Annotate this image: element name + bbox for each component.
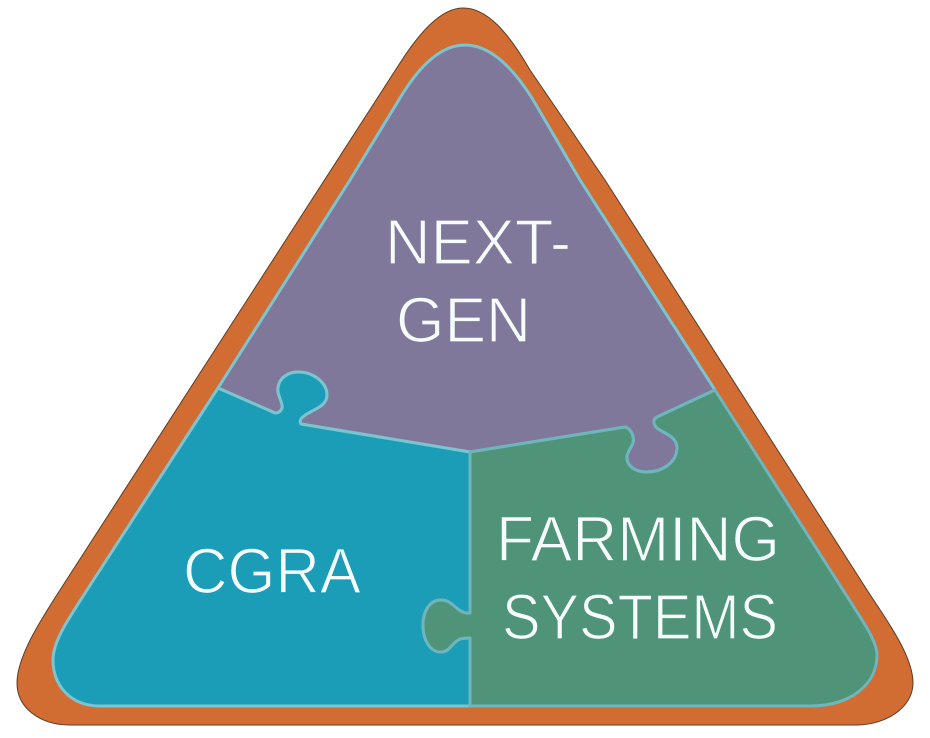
label: FARMING SYSTEMS: FARMING (496, 503, 780, 575)
label: NEXT-GEN (385, 206, 571, 356)
label: CGRA: CGRA (183, 535, 361, 607)
puzzle piece: CGRA (53, 372, 470, 706)
label: NEXT-GEN: GEN (396, 284, 531, 356)
label: FARMING SYSTEMS: SYSTEMS (502, 581, 778, 653)
label: NEXT-GEN: NEXT- (385, 206, 571, 278)
puzzle piece: Next-Gen (218, 45, 715, 472)
label: FARMING SYSTEMS (496, 503, 780, 653)
puzzle piece: Farming Systems (423, 390, 877, 706)
